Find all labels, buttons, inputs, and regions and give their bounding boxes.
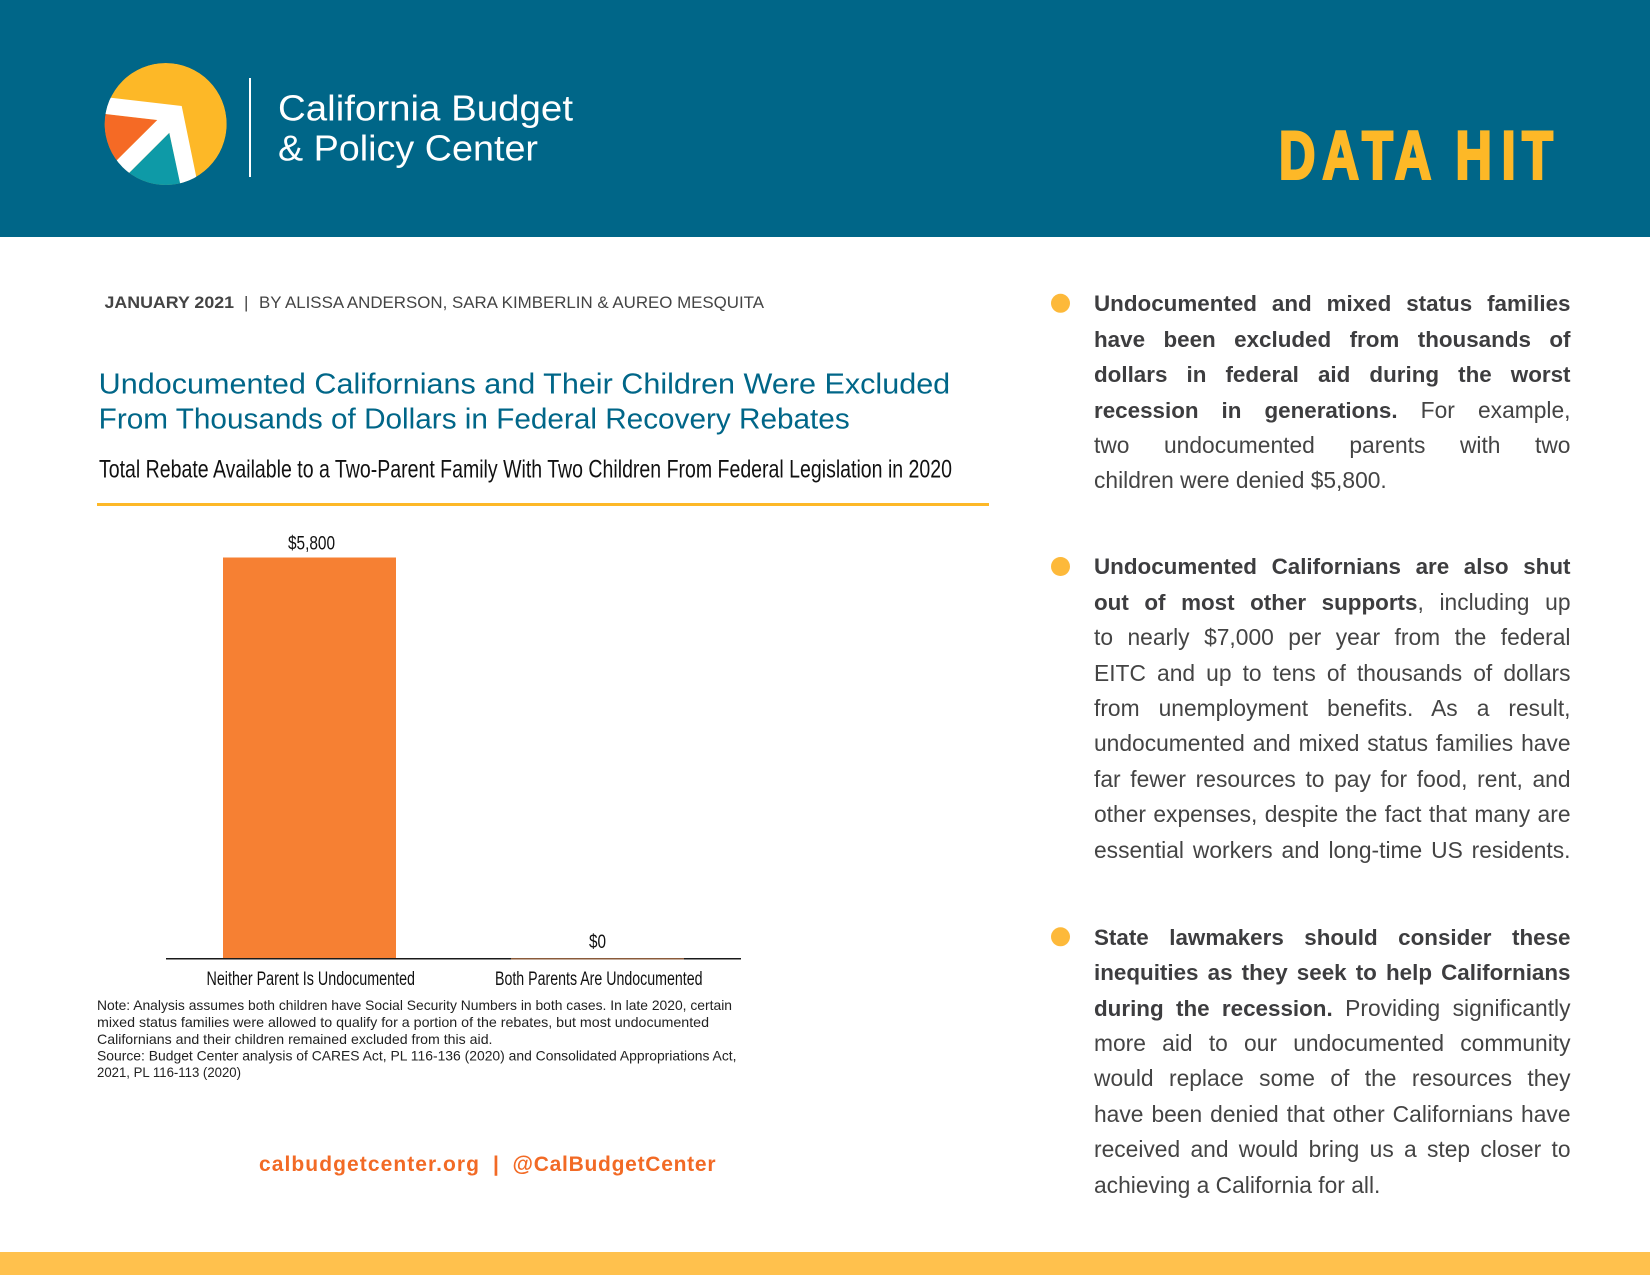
- text block: second takeaway: out of most other supports, including up: [1094, 589, 1570, 615]
- text block: second takeaway: EITC and up to tens of thousands of dollars: [1094, 660, 1570, 686]
- text block: first takeaway: recession in generations. For example,: [1094, 397, 1570, 423]
- axis line: [166, 958, 741, 960]
- bullet 1: [1051, 294, 1070, 313]
- text block: first takeaway: [1094, 291, 1570, 493]
- chart heading: From Thousands of Dollars in Federal Recovery Rebates: [99, 404, 850, 436]
- footer band: [0, 1252, 1650, 1275]
- text block: second takeaway: [1094, 554, 1570, 863]
- text block: first takeaway: have been excluded from thousands of: [1094, 327, 1570, 352]
- text block: second takeaway: other expenses, despite the fact that many are: [1094, 801, 1570, 827]
- website and handle: @CalBudgetCenter: [512, 1153, 716, 1176]
- text block: first takeaway: Undocumented and mixed status families: [1094, 291, 1570, 316]
- text block: third takeaway: received and would bring us a step closer to: [1094, 1136, 1570, 1162]
- chart heading: Undocumented Californians and Their Children Were Excluded: [99, 368, 950, 400]
- date and authors line: |: [244, 293, 248, 312]
- website and handle: calbudgetcenter.org: [259, 1153, 479, 1176]
- text block: second takeaway: essential workers and long-time US residents.: [1094, 837, 1570, 863]
- category label: neither: Neither Parent Is Undocumented: [206, 969, 415, 990]
- logo divider: [249, 78, 251, 177]
- title: DATA HIT: DATA HIT: [1279, 117, 1553, 193]
- date and authors line: BY ALISSA ANDERSON, SARA KIMBERLIN & AUREO MESQUITA: [259, 293, 765, 312]
- category label: both: Both Parents Are Undocumented: [495, 969, 702, 990]
- text block: third takeaway: achieving a California for all.: [1094, 1172, 1380, 1198]
- icon: California Budget logo circle with arrow: [104, 63, 227, 185]
- text block: second takeaway: undocumented and mixed status families have: [1094, 730, 1570, 756]
- note and source: [97, 997, 736, 1080]
- website and handle: |: [493, 1153, 499, 1176]
- text block: third takeaway: [1094, 925, 1570, 1198]
- text block: third takeaway: State lawmakers should consider these: [1094, 925, 1570, 950]
- note and source: Source: Budget Center analysis of CARES Act, PL 116-136 (2020) and Consolidated Appropriations Act,: [97, 1048, 736, 1064]
- text block: third takeaway: have been denied that other Californians have: [1094, 1101, 1570, 1127]
- text block: first takeaway: dollars in federal aid during the worst: [1094, 362, 1570, 387]
- bullet 3: [1051, 927, 1070, 946]
- logo wordmark: California Budget: [278, 88, 573, 128]
- value label $5,800: $5,800: [288, 534, 335, 555]
- text block: third takeaway: would replace some of the resources they: [1094, 1065, 1570, 1091]
- text block: third takeaway: more aid to our undocumented community: [1094, 1030, 1570, 1056]
- bullet 2: [1051, 557, 1070, 576]
- date and authors line: JANUARY 2021: [104, 293, 234, 312]
- bar chart: [166, 534, 741, 990]
- bar: both parents undocumented (zero): [511, 958, 684, 960]
- value label $0: $0: [589, 932, 606, 953]
- logo wordmark: & Policy Center: [278, 128, 538, 168]
- chart subtitle: Total Rebate Available to a Two-Parent Family With Two Children From Federal Legislation in 2020: [99, 456, 952, 484]
- text block: first takeaway: two undocumented parents with two: [1094, 432, 1570, 458]
- text block: first takeaway: children were denied $5,800.: [1094, 467, 1387, 493]
- chart heading: [99, 368, 950, 436]
- heading rule: [97, 503, 989, 506]
- note and source: mixed status families were allowed to qualify for a portion of the rebates, but most undocumented: [97, 1014, 709, 1030]
- header band: [0, 0, 1650, 237]
- text block: second takeaway: far fewer resources to pay for food, rent, and: [1094, 766, 1570, 792]
- note and source: Note: Analysis assumes both children have Social Security Numbers in both cases. In late 2020, certain: [97, 997, 732, 1013]
- note and source: 2021, PL 116-113 (2020): [97, 1064, 241, 1080]
- website and handle: [259, 1153, 716, 1176]
- text block: second takeaway: to nearly $7,000 per year from the federal: [1094, 624, 1570, 650]
- text block: third takeaway: inequities as they seek to help Californians: [1094, 960, 1570, 985]
- text block: second takeaway: Undocumented Californians are also shut: [1094, 554, 1570, 579]
- note and source: Californians and their children remained excluded from this aid.: [97, 1031, 492, 1047]
- bar: neither parent undocumented: [223, 558, 396, 958]
- logo wordmark: [278, 88, 573, 168]
- text block: third takeaway: during the recession. Providing significantly: [1094, 995, 1570, 1021]
- text block: second takeaway: from unemployment benefits. As a result,: [1094, 695, 1570, 721]
